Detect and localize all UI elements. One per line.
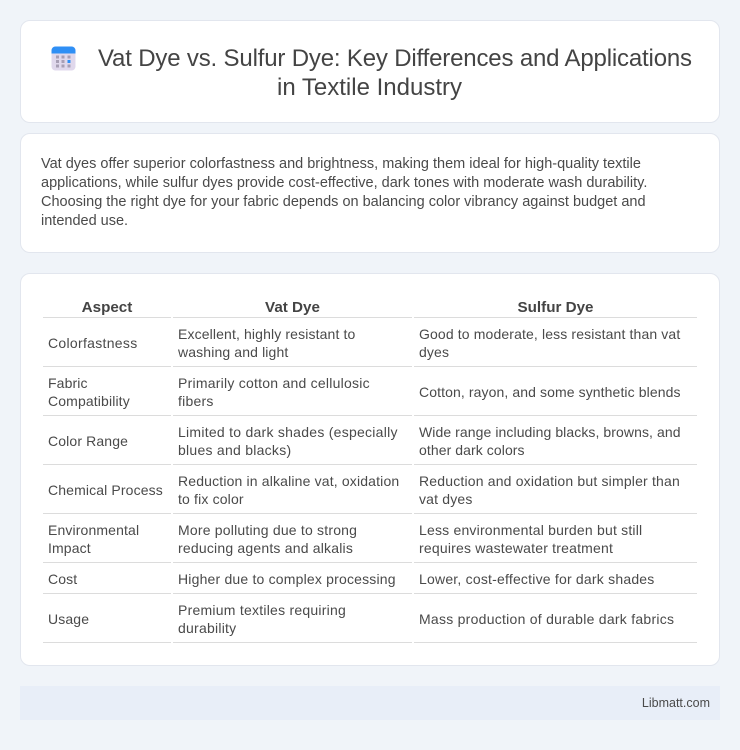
row: Usage: Usage — [48, 611, 89, 627]
cell: vat process: Reduction in alkaline vat, oxidation — [178, 473, 399, 489]
header: Sulfur Dye: Sulfur Dye — [518, 299, 593, 316]
cell: vat usage — [178, 602, 346, 636]
cell: sulfur environment: requires wastewater treatment — [419, 540, 613, 556]
row: Environmental Impact: Environmental — [48, 522, 139, 538]
intro text: applications, while sulfur dyes provide cost-effective, dark tones with moderate wash durability. — [41, 175, 647, 191]
intro text: intended use. — [41, 213, 128, 229]
cell: sulfur usage: Mass production of durable dark fabrics — [419, 611, 674, 627]
row: Chemical Process: Chemical Process — [48, 482, 163, 498]
cell: vat environment: reducing agents and alkalis — [178, 540, 353, 556]
cell: vat fabric — [178, 375, 370, 409]
intro text: Choosing the right dye for your fabric depends on balancing color vibrancy against budget and — [41, 194, 646, 210]
row: Cost: Cost — [48, 571, 77, 587]
cell: vat colorfastness — [178, 326, 355, 360]
row: Environmental Impact: Impact — [48, 540, 91, 556]
cell: sulfur environment — [419, 522, 642, 556]
cell: vat cost: Higher due to complex processing — [178, 571, 396, 587]
cell: vat environment: More polluting due to strong — [178, 522, 357, 538]
cell: sulfur colorfastness — [419, 326, 680, 360]
footer bar — [20, 686, 720, 720]
cell: vat usage: Premium textiles requiring — [178, 602, 346, 618]
header: Vat Dye: Vat Dye — [265, 299, 320, 316]
cell: sulfur color range: other dark colors — [419, 442, 525, 458]
row: Colorfastness: Colorfastness — [48, 335, 138, 351]
cell: vat colorfastness: Excellent, highly resistant to — [178, 326, 355, 342]
panel: comparison table — [20, 273, 720, 666]
cell: vat colorfastness: washing and light — [178, 344, 288, 360]
row: Color Range: Color Range — [48, 433, 128, 449]
panel: title card — [20, 20, 720, 123]
footer text: Libmatt.com — [642, 696, 710, 710]
title: Vat Dye vs. Sulfur Dye: Key Differences and Applications — [98, 45, 692, 72]
cell: sulfur fabric: Cotton, rayon, and some synthetic blends — [419, 384, 681, 400]
cell: sulfur process — [419, 473, 680, 507]
cell: sulfur process: vat dyes — [419, 491, 473, 507]
title: in Textile Industry — [277, 74, 462, 101]
row: Fabric Compatibility: Fabric — [48, 375, 88, 391]
cell: vat fabric: fibers — [178, 393, 214, 409]
icon: calendar — [52, 46, 76, 70]
comparison table — [43, 299, 697, 643]
cell: sulfur cost: Lower, cost-effective for dark shades — [419, 571, 655, 587]
cell: vat fabric: Primarily cotton and cellulosic — [178, 375, 370, 391]
title — [98, 45, 692, 101]
cell: vat process — [178, 473, 399, 507]
row: Fabric Compatibility — [48, 375, 130, 409]
cell: sulfur colorfastness: Good to moderate, less resistant than vat — [419, 326, 680, 342]
intro text — [41, 156, 647, 229]
panel: introduction — [20, 133, 720, 253]
cell: sulfur color range — [419, 424, 681, 458]
cell: sulfur color range: Wide range including blacks, browns, and — [419, 424, 681, 440]
cell: vat usage: durability — [178, 620, 236, 636]
header: Aspect: Aspect — [82, 299, 132, 316]
cell: vat process: to fix color — [178, 491, 244, 507]
row: Environmental Impact — [48, 522, 139, 556]
row: Fabric Compatibility: Compatibility — [48, 393, 130, 409]
intro text: Vat dyes offer superior colorfastness and brightness, making them ideal for high-quality textile — [41, 156, 641, 172]
cell: vat color range: Limited to dark shades (especially — [178, 424, 398, 440]
cell: sulfur colorfastness: dyes — [419, 344, 449, 360]
cell: vat color range: blues and blacks) — [178, 442, 291, 458]
cell: vat environment — [178, 522, 357, 556]
cell: sulfur process: Reduction and oxidation but simpler than — [419, 473, 680, 489]
cell: sulfur environment: Less environmental burden but still — [419, 522, 642, 538]
cell: vat color range — [178, 424, 398, 458]
